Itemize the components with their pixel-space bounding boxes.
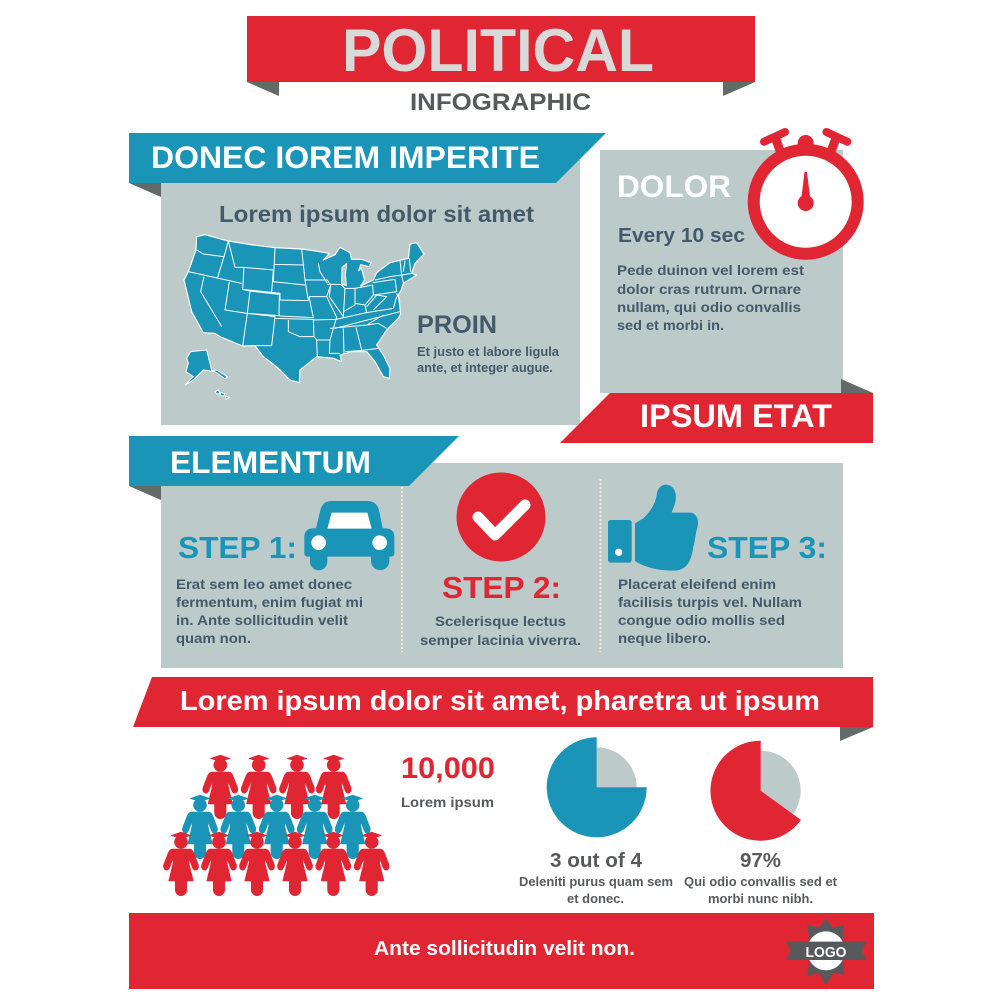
text block	[420, 613, 581, 648]
ribbon: Ipsum Etat	[560, 379, 873, 443]
text block: quam non.	[176, 630, 251, 646]
footer	[129, 913, 874, 989]
text block: dolor cras rutrum. Ornare	[617, 281, 801, 297]
text block: Pede duinon vel lorem est	[617, 262, 804, 278]
callout: Proin	[417, 311, 560, 375]
subtitle: INFOGRAPHIC	[410, 89, 591, 116]
icon: car	[304, 501, 394, 570]
callout: Proin: PROIN	[417, 311, 497, 339]
text block: sed et morbi in.	[617, 317, 724, 333]
heading: Dolor: DOLOR	[617, 168, 731, 204]
footer: Ante sollicitudin velit non.	[374, 938, 635, 960]
step 3: STEP 3:	[707, 530, 827, 565]
step 1	[176, 501, 394, 646]
icon: logo badge: LOGO	[806, 945, 846, 961]
stat: 10,000: 10,000	[401, 752, 495, 785]
stat text: 97%: morbi nunc nibh.	[708, 892, 813, 906]
stat text: 3 out of 4: 3 out of 4	[550, 850, 643, 872]
text block	[617, 262, 804, 333]
text block	[618, 576, 802, 646]
heading banner: Donec	[129, 133, 606, 183]
step 3	[608, 485, 827, 646]
icon: Hawaii	[215, 390, 229, 399]
title: POLITICAL: POLITICAL	[342, 17, 654, 84]
text block: congue odio mollis sed	[618, 612, 785, 628]
text block: facilisis turpis vel. Nullam	[618, 594, 802, 610]
map heading: Lorem ipsum dolor sit amet	[219, 201, 534, 227]
text block: neque libero.	[618, 630, 711, 646]
stat text: 97%	[684, 850, 838, 906]
panel: steps	[129, 436, 843, 668]
stat text: 97%: 97%	[740, 850, 781, 872]
text block: nullam, qui odio convallis	[617, 299, 801, 315]
ribbon: section heading: Lorem ipsum dolor sit amet, pharetra ut ipsum	[180, 685, 820, 716]
icon: check mark	[456, 472, 546, 562]
text block: fermentum, enim fugiat mi	[176, 594, 363, 610]
stat: 10,000: Lorem ipsum	[401, 794, 494, 810]
step 1: STEP 1:	[178, 530, 297, 565]
icon: thumbs up	[608, 485, 698, 571]
text block: Scelerisque lectus	[435, 613, 566, 629]
stat text: 3 out of 4: Deleniti purus quam sem	[519, 875, 673, 889]
icon: stopwatch	[748, 132, 864, 260]
pie chart: 97%	[710, 741, 801, 841]
ribbon: Ipsum Etat: IPSUM ETAT	[640, 398, 832, 434]
ribbon: section heading	[133, 677, 873, 741]
icon: Alaska	[185, 350, 227, 385]
heading banner: Donec: DONEC IOREM IMPERITE	[151, 139, 540, 175]
text block: semper lacinia viverra.	[420, 632, 581, 648]
map: United States	[184, 235, 424, 399]
stat text: 3 out of 4	[519, 850, 673, 906]
heading banner: Elementum	[129, 436, 459, 486]
stat text: 3 out of 4: et donec.	[567, 892, 624, 906]
icon: logo badge	[786, 919, 867, 985]
heading banner: Elementum: ELEMENTUM	[170, 444, 371, 480]
pictogram: graduates	[163, 755, 389, 896]
panel: map	[129, 133, 606, 425]
text block	[176, 576, 363, 646]
pie chart: 3 out of 4	[547, 737, 647, 837]
text block: Erat sem leo amet donec	[176, 576, 352, 592]
subheading: Every 10 sec	[618, 225, 745, 247]
step 2	[420, 472, 581, 648]
title banner	[247, 16, 755, 96]
stat text: 97%: Qui odio convallis sed et	[684, 875, 838, 889]
text block: Placerat eleifend enim	[618, 576, 776, 592]
callout: Proin: Et justo et labore ligula	[417, 344, 560, 359]
callout: Proin: ante, et integer augue.	[417, 360, 553, 375]
step 2: STEP 2:	[442, 570, 561, 605]
stat: 10,000	[401, 752, 495, 810]
panel: dolor	[600, 150, 843, 393]
text block: in. Ante sollicitudin velit	[176, 612, 348, 628]
